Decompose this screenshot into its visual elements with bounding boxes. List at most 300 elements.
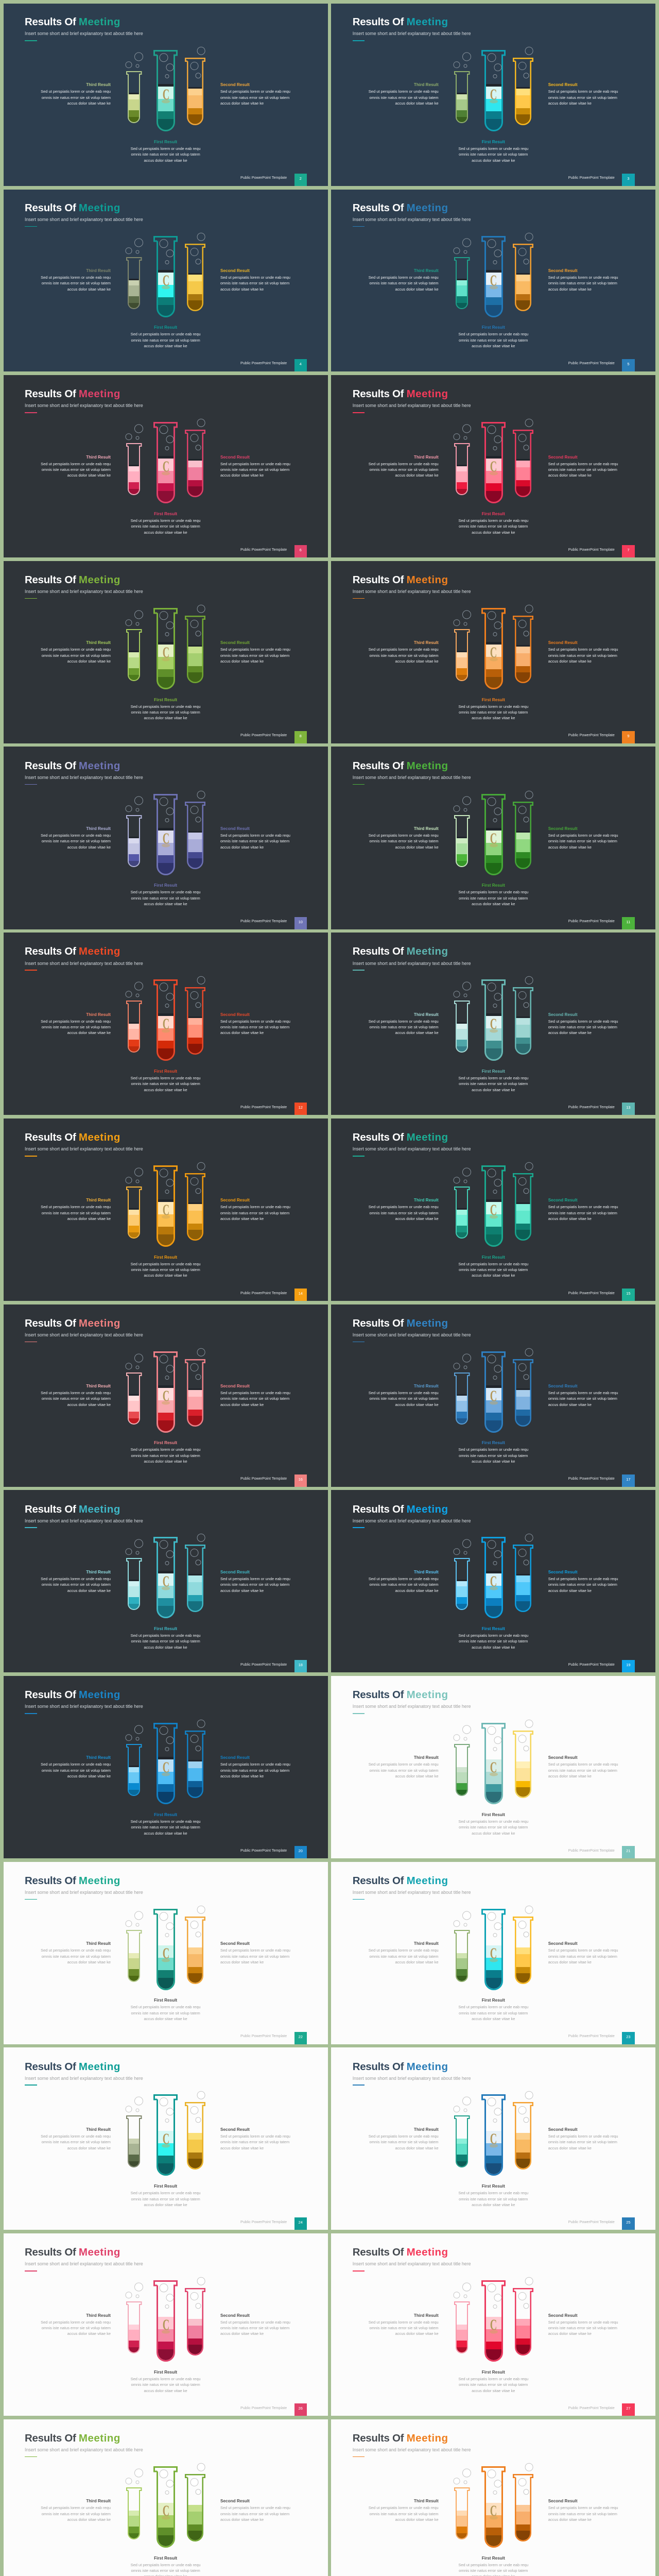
- second result: Sed ut perspiatis lorem or unde eab requ: [220, 89, 290, 94]
- first result: [125, 2554, 207, 2576]
- second result: Sed ut perspiatis lorem or unde eab requ: [548, 2505, 618, 2510]
- third result: accus dolor sitae vitae ke: [395, 2331, 439, 2336]
- footer: Public PowerPoint Template: [568, 1105, 615, 1109]
- test tubes: [453, 418, 533, 503]
- third result: Third Result: [86, 1012, 111, 1017]
- third result: [356, 825, 439, 850]
- first result: Sed ut perspiatis lorem or unde eab requ: [458, 1447, 528, 1452]
- page badge: [294, 545, 307, 557]
- second result: omnis iste natus error sie sit volup tatem: [548, 1582, 617, 1587]
- third result: [356, 1568, 439, 1594]
- second result: [220, 268, 290, 292]
- second result: omnis iste natus error sie sit volup tatem: [220, 2140, 289, 2144]
- page badge: [294, 1475, 307, 1487]
- third result: Sed ut perspiatis lorem or unde eab requ: [41, 275, 111, 280]
- second result: omnis iste natus error sie sit volup tatem: [548, 2512, 617, 2516]
- second result: Second Result: [548, 1384, 578, 1388]
- first result: Sed ut perspiatis lorem or unde eab requ: [458, 1076, 528, 1080]
- page badge: [294, 2403, 307, 2416]
- second result: Second Result: [220, 1198, 250, 1202]
- third result: accus dolor sitae vitae ke: [395, 1774, 439, 1778]
- panel: slide 8: [3, 561, 327, 743]
- second result: [548, 2497, 631, 2522]
- test tubes: [126, 46, 205, 131]
- test tubes: [122, 2276, 210, 2363]
- second result: Second Result: [220, 2313, 250, 2318]
- second result: [220, 2497, 303, 2522]
- watermark: C: [490, 830, 497, 847]
- third result: Sed ut perspiatis lorem or unde eab requ: [41, 462, 111, 466]
- second result: accus dolor sitae vitae ke: [220, 659, 264, 664]
- first result: accus dolor sitae vitae ke: [144, 1273, 187, 1278]
- test tubes: [122, 2462, 210, 2549]
- first result: First Result: [154, 2370, 177, 2375]
- third result: [28, 2497, 111, 2522]
- first result: accus dolor sitae vitae ke: [144, 902, 187, 906]
- third result: [28, 825, 111, 850]
- first result: First Result: [154, 1626, 177, 1631]
- third result: Third Result: [414, 2127, 439, 2132]
- second result: accus dolor sitae vitae ke: [548, 1960, 592, 1964]
- third result: Third Result: [86, 640, 111, 645]
- first result: omnis iste natus error sie sit volup tatem: [131, 1639, 200, 1643]
- page badge: [622, 731, 635, 743]
- second result: accus dolor sitae vitae ke: [548, 2517, 592, 2522]
- title: Results Of Meeting: [353, 388, 448, 400]
- second result: accus dolor sitae vitae ke: [220, 1588, 264, 1593]
- third result: accus dolor sitae vitae ke: [67, 2517, 111, 2522]
- first result: First Result: [482, 512, 505, 516]
- second result: [220, 455, 290, 478]
- page badge: [622, 1660, 635, 1672]
- first result: omnis iste natus error sie sit volup tatem: [459, 896, 528, 901]
- subtitle: Insert some short and brief explanatory text about title here: [353, 1146, 471, 1151]
- test tubes: [453, 233, 533, 317]
- first result: omnis iste natus error sie sit volup tatem: [459, 1453, 528, 1458]
- second result: accus dolor sitae vitae ke: [548, 845, 592, 850]
- first result: First Result: [482, 2556, 505, 2561]
- test tubes: [453, 605, 533, 689]
- first result: omnis iste natus error sie sit volup tatem: [131, 1453, 200, 1458]
- watermark: C: [162, 458, 169, 475]
- third result: accus dolor sitae vitae ke: [395, 287, 439, 292]
- panel: slide 13: [331, 933, 655, 1115]
- test tubes: [126, 605, 205, 689]
- second result: omnis iste natus error sie sit volup tatem: [220, 1396, 289, 1401]
- third result: omnis iste natus error sie sit volup tatem: [42, 1211, 111, 1215]
- test tubes: [449, 1161, 538, 1248]
- footer: Public PowerPoint Template: [568, 2405, 615, 2410]
- third result: [356, 1011, 439, 1036]
- second result: accus dolor sitae vitae ke: [220, 2331, 264, 2336]
- test tubes: [449, 789, 538, 877]
- first result: [125, 1439, 207, 1465]
- third result: Third Result: [414, 1012, 439, 1017]
- panel: slide 15: [331, 1118, 655, 1301]
- first result: omnis iste natus error sie sit volup tatem: [459, 2382, 528, 2387]
- third result: omnis iste natus error sie sit volup tatem: [369, 653, 439, 658]
- second result: accus dolor sitae vitae ke: [220, 1402, 264, 1407]
- page badge: [622, 917, 635, 929]
- panel: slide 29: [331, 2419, 655, 2576]
- subtitle: Insert some short and brief explanatory text about title here: [353, 961, 471, 966]
- subtitle: Insert some short and brief explanatory text about title here: [25, 217, 143, 222]
- second result: [548, 82, 618, 106]
- panel: slide 12: [3, 933, 327, 1115]
- first result: accus dolor sitae vitae ke: [472, 158, 515, 163]
- panel: slide 2: [3, 4, 327, 185]
- panel: slide 19: [331, 1490, 655, 1672]
- first result: First Result: [154, 512, 177, 516]
- second result: omnis iste natus error sie sit volup tatem: [548, 1025, 617, 1029]
- first result: [452, 1625, 534, 1650]
- second result: Second Result: [220, 1755, 250, 1760]
- second result: Second Result: [220, 826, 250, 831]
- second result: Sed ut perspiatis lorem or unde eab requ: [220, 1019, 290, 1024]
- title: Results Of Meeting: [353, 760, 448, 772]
- page badge: 13: [626, 1105, 631, 1110]
- footer: Public PowerPoint Template: [240, 1291, 287, 1295]
- subtitle: Insert some short and brief explanatory text about title here: [353, 1890, 471, 1895]
- title: Results Of Meeting: [25, 945, 120, 957]
- second result: [548, 268, 618, 292]
- title: Results Of Meeting: [353, 202, 448, 214]
- page badge: [622, 173, 635, 185]
- third result: omnis iste natus error sie sit volup tatem: [369, 1954, 439, 1959]
- second result: [548, 455, 618, 478]
- third result: [356, 1754, 439, 1780]
- first result: omnis iste natus error sie sit volup tatem: [131, 2197, 200, 2201]
- second result: [548, 1011, 631, 1036]
- second result: Second Result: [548, 1570, 578, 1574]
- panel: slide 5: [331, 190, 655, 371]
- subtitle: Insert some short and brief explanatory text about title here: [25, 1146, 143, 1151]
- third result: Sed ut perspiatis lorem or unde eab requ: [41, 647, 111, 652]
- title: Results Of Meeting: [25, 1875, 120, 1887]
- first result: omnis iste natus error sie sit volup tatem: [459, 1825, 528, 1829]
- second result: [548, 2312, 631, 2337]
- third result: accus dolor sitae vitae ke: [395, 1402, 439, 1407]
- third result: Sed ut perspiatis lorem or unde eab requ: [369, 2134, 439, 2139]
- first result: [458, 698, 528, 720]
- third result: accus dolor sitae vitae ke: [395, 659, 439, 664]
- first result: accus dolor sitae vitae ke: [144, 158, 187, 163]
- third result: omnis iste natus error sie sit volup tatem: [369, 467, 439, 472]
- first result: omnis iste natus error sie sit volup tatem: [459, 152, 528, 157]
- third result: omnis iste natus error sie sit volup tatem: [369, 1025, 439, 1029]
- footer: Public PowerPoint Template: [240, 1848, 287, 1853]
- third result: omnis iste natus error sie sit volup tatem: [42, 653, 111, 658]
- panel: slide 17: [331, 1304, 655, 1487]
- third result: omnis iste natus error sie sit volup tatem: [42, 2140, 111, 2144]
- first result: Sed ut perspiatis lorem or unde eab requ: [458, 2005, 528, 2009]
- third result: Sed ut perspiatis lorem or unde eab requ: [41, 2134, 111, 2139]
- second result: accus dolor sitae vitae ke: [220, 473, 264, 478]
- third result: [369, 268, 439, 292]
- third result: Third Result: [86, 1384, 111, 1388]
- first result: accus dolor sitae vitae ke: [472, 2388, 515, 2393]
- subtitle: Insert some short and brief explanatory text about title here: [353, 217, 471, 222]
- second result: omnis iste natus error sie sit volup tatem: [548, 1396, 617, 1401]
- third result: [28, 2126, 111, 2151]
- watermark: C: [490, 2316, 497, 2333]
- first result: Sed ut perspiatis lorem or unde eab requ: [131, 518, 201, 523]
- third result: Third Result: [414, 826, 439, 831]
- watermark: C: [162, 644, 169, 661]
- third result: Sed ut perspiatis lorem or unde eab requ: [41, 1391, 111, 1395]
- third result: omnis iste natus error sie sit volup tatem: [369, 1582, 439, 1587]
- page badge: [622, 2217, 635, 2230]
- second result: accus dolor sitae vitae ke: [548, 1774, 592, 1778]
- first result: First Result: [482, 2184, 505, 2189]
- page badge: [294, 917, 307, 929]
- title: Results Of Meeting: [25, 2432, 120, 2444]
- first result: First Result: [482, 883, 505, 888]
- second result: Second Result: [220, 455, 250, 460]
- second result: [220, 1011, 303, 1036]
- watermark: C: [490, 86, 497, 103]
- subtitle: Insert some short and brief explanatory text about title here: [25, 1332, 143, 1337]
- footer: Public PowerPoint Template: [240, 2405, 287, 2410]
- page badge: [294, 2032, 307, 2044]
- second result: omnis iste natus error sie sit volup tatem: [548, 95, 617, 100]
- second result: Sed ut perspiatis lorem or unde eab requ: [548, 2320, 618, 2325]
- first result: [452, 1253, 534, 1279]
- page badge: 12: [299, 1105, 303, 1110]
- second result: accus dolor sitae vitae ke: [220, 1030, 264, 1035]
- test tubes: [453, 46, 533, 131]
- first result: [125, 1811, 207, 1836]
- title: Results Of Meeting: [353, 945, 448, 957]
- third result: [369, 455, 439, 478]
- third result: Sed ut perspiatis lorem or unde eab requ: [41, 2505, 111, 2510]
- second result: Sed ut perspiatis lorem or unde eab requ: [548, 833, 618, 838]
- test tubes: [122, 789, 210, 877]
- third result: omnis iste natus error sie sit volup tatem: [42, 1954, 111, 1959]
- third result: Third Result: [414, 640, 439, 645]
- first result: Sed ut perspiatis lorem or unde eab requ: [458, 332, 528, 336]
- first result: accus dolor sitae vitae ke: [144, 2388, 187, 2393]
- first result: [125, 882, 207, 907]
- second result: omnis iste natus error sie sit volup tatem: [548, 281, 617, 285]
- first result: omnis iste natus error sie sit volup tatem: [131, 710, 200, 715]
- third result: omnis iste natus error sie sit volup tatem: [42, 281, 111, 285]
- test tubes: [126, 233, 205, 317]
- panel: slide 18: [3, 1490, 327, 1672]
- first result: Sed ut perspiatis lorem or unde eab requ: [131, 1076, 201, 1080]
- first result: [131, 698, 201, 720]
- second result: [548, 825, 631, 850]
- third result: accus dolor sitae vitae ke: [67, 1216, 111, 1221]
- third result: Third Result: [86, 1570, 111, 1574]
- page badge: 26: [299, 2406, 303, 2411]
- first result: First Result: [482, 1069, 505, 1074]
- page badge: 8: [300, 734, 302, 738]
- subtitle: Insert some short and brief explanatory text about title here: [25, 589, 143, 594]
- title: Results Of Meeting: [25, 2246, 120, 2258]
- first result: [452, 1439, 534, 1465]
- second result: Second Result: [220, 1570, 250, 1574]
- third result: Third Result: [414, 1941, 439, 1946]
- watermark: C: [162, 2316, 169, 2333]
- page badge: 16: [299, 1477, 303, 1482]
- second result: accus dolor sitae vitae ke: [548, 473, 592, 478]
- subtitle: Insert some short and brief explanatory text about title here: [25, 31, 143, 36]
- test tubes: [122, 975, 210, 1062]
- third result: [28, 1382, 111, 1408]
- second result: Second Result: [548, 455, 578, 460]
- first result: First Result: [482, 1812, 505, 1817]
- third result: [356, 1196, 439, 1222]
- panel: slide 25: [331, 2047, 655, 2230]
- page badge: 27: [626, 2406, 631, 2411]
- third result: [28, 1754, 111, 1780]
- third result: accus dolor sitae vitae ke: [67, 287, 111, 292]
- page badge: 24: [299, 2220, 303, 2225]
- first result: Sed ut perspiatis lorem or unde eab requ: [458, 518, 528, 523]
- first result: accus dolor sitae vitae ke: [472, 344, 515, 348]
- first result: [458, 325, 528, 348]
- third result: [41, 640, 111, 664]
- second result: Sed ut perspiatis lorem or unde eab requ: [548, 647, 618, 652]
- second result: omnis iste natus error sie sit volup tatem: [548, 2140, 617, 2144]
- first result: omnis iste natus error sie sit volup tatem: [459, 524, 528, 529]
- third result: Sed ut perspiatis lorem or unde eab requ: [369, 1019, 439, 1024]
- second result: omnis iste natus error sie sit volup tatem: [220, 1954, 289, 1959]
- first result: [125, 1253, 207, 1279]
- panel: slide 20: [3, 1676, 327, 1858]
- title: Results Of Meeting: [353, 2061, 448, 2073]
- first result: First Result: [482, 1998, 505, 2003]
- panel: slide 16: [3, 1304, 327, 1487]
- first result: accus dolor sitae vitae ke: [144, 2016, 187, 2021]
- second result: Sed ut perspiatis lorem or unde eab requ: [548, 1577, 618, 1581]
- second result: accus dolor sitae vitae ke: [220, 101, 264, 106]
- first result: omnis iste natus error sie sit volup tatem: [131, 524, 200, 529]
- second result: [220, 825, 303, 850]
- third result: omnis iste natus error sie sit volup tatem: [42, 1396, 111, 1401]
- first result: Sed ut perspiatis lorem or unde eab requ: [131, 1819, 201, 1824]
- third result: omnis iste natus error sie sit volup tatem: [369, 1768, 439, 1773]
- panel: slide 7: [331, 375, 655, 557]
- subtitle: Insert some short and brief explanatory text about title here: [353, 1518, 471, 1523]
- second result: omnis iste natus error sie sit volup tatem: [548, 1768, 617, 1773]
- first result: accus dolor sitae vitae ke: [472, 1831, 515, 1836]
- watermark: C: [490, 2502, 497, 2519]
- third result: Third Result: [414, 2499, 439, 2503]
- page badge: 14: [299, 1291, 303, 1296]
- second result: accus dolor sitae vitae ke: [548, 2146, 592, 2150]
- title: Results Of Meeting: [353, 2246, 448, 2258]
- first result: Sed ut perspiatis lorem or unde eab requ: [458, 890, 528, 894]
- subtitle: Insert some short and brief explanatory text about title here: [353, 2447, 471, 2452]
- first result: First Result: [154, 2184, 177, 2189]
- third result: accus dolor sitae vitae ke: [67, 101, 111, 106]
- footer: Public PowerPoint Template: [240, 733, 287, 737]
- test tubes: [122, 1161, 210, 1248]
- second result: accus dolor sitae vitae ke: [220, 1774, 264, 1778]
- first result: accus dolor sitae vitae ke: [472, 1645, 515, 1650]
- subtitle: Insert some short and brief explanatory text about title here: [353, 31, 471, 36]
- footer: Public PowerPoint Template: [568, 1848, 615, 1853]
- third result: Sed ut perspiatis lorem or unde eab requ: [369, 2505, 439, 2510]
- first result: Sed ut perspiatis lorem or unde eab requ: [458, 146, 528, 151]
- third result: accus dolor sitae vitae ke: [67, 659, 111, 664]
- third result: Third Result: [414, 1198, 439, 1202]
- watermark: C: [162, 1759, 169, 1776]
- footer: Public PowerPoint Template: [240, 1105, 287, 1109]
- second result: omnis iste natus error sie sit volup tatem: [548, 1211, 617, 1215]
- first result: First Result: [154, 1255, 177, 1260]
- third result: Sed ut perspiatis lorem or unde eab requ: [41, 1948, 111, 1953]
- panel: slide 11: [331, 747, 655, 929]
- second result: omnis iste natus error sie sit volup tatem: [548, 2326, 617, 2330]
- second result: omnis iste natus error sie sit volup tatem: [220, 839, 289, 843]
- footer: Public PowerPoint Template: [568, 1662, 615, 1667]
- first result: accus dolor sitae vitae ke: [144, 716, 187, 720]
- third result: omnis iste natus error sie sit volup tatem: [42, 2512, 111, 2516]
- test tubes: [449, 2090, 538, 2177]
- third result: Third Result: [86, 2499, 111, 2503]
- third result: Third Result: [86, 2313, 111, 2318]
- first result: [452, 2554, 534, 2576]
- second result: Second Result: [548, 1198, 578, 1202]
- page badge: 18: [299, 1663, 303, 1667]
- third result: omnis iste natus error sie sit volup tatem: [42, 2326, 111, 2330]
- title: Results Of Meeting: [353, 16, 448, 28]
- second result: omnis iste natus error sie sit volup tatem: [548, 653, 617, 658]
- footer: Public PowerPoint Template: [240, 175, 287, 180]
- footer: Public PowerPoint Template: [568, 919, 615, 923]
- second result: Second Result: [548, 1755, 578, 1760]
- first result: accus dolor sitae vitae ke: [472, 2016, 515, 2021]
- watermark: C: [490, 1759, 497, 1776]
- second result: Second Result: [548, 2127, 578, 2132]
- first result: [458, 512, 528, 535]
- third result: Sed ut perspiatis lorem or unde eab requ: [369, 1948, 439, 1953]
- second result: Second Result: [220, 2499, 250, 2503]
- second result: Sed ut perspiatis lorem or unde eab requ: [220, 1948, 290, 1953]
- third result: accus dolor sitae vitae ke: [395, 101, 439, 106]
- third result: accus dolor sitae vitae ke: [67, 1030, 111, 1035]
- title: Results Of Meeting: [25, 1317, 120, 1329]
- third result: accus dolor sitae vitae ke: [395, 1030, 439, 1035]
- first result: Sed ut perspiatis lorem or unde eab requ: [458, 2191, 528, 2195]
- title: Results Of Meeting: [25, 2061, 120, 2073]
- third result: [356, 2497, 439, 2522]
- third result: Third Result: [86, 2127, 111, 2132]
- watermark: C: [490, 1573, 497, 1590]
- footer: Public PowerPoint Template: [568, 175, 615, 180]
- first result: omnis iste natus error sie sit volup tatem: [131, 2568, 200, 2573]
- first result: [125, 1067, 207, 1093]
- second result: Second Result: [220, 82, 250, 87]
- watermark: C: [162, 1201, 169, 1218]
- second result: [220, 1196, 303, 1222]
- panel: slide 14: [3, 1118, 327, 1301]
- second result: Sed ut perspiatis lorem or unde eab requ: [220, 462, 290, 466]
- third result: omnis iste natus error sie sit volup tatem: [42, 1025, 111, 1029]
- subtitle: Insert some short and brief explanatory text about title here: [25, 403, 143, 408]
- first result: omnis iste natus error sie sit volup tatem: [459, 2568, 528, 2573]
- first result: First Result: [482, 1626, 505, 1631]
- second result: [220, 1382, 303, 1408]
- footer: Public PowerPoint Template: [568, 547, 615, 552]
- second result: Sed ut perspiatis lorem or unde eab requ: [220, 647, 290, 652]
- first result: Sed ut perspiatis lorem or unde eab requ: [131, 332, 201, 336]
- watermark: C: [490, 458, 497, 475]
- panel: slide 9: [331, 561, 655, 743]
